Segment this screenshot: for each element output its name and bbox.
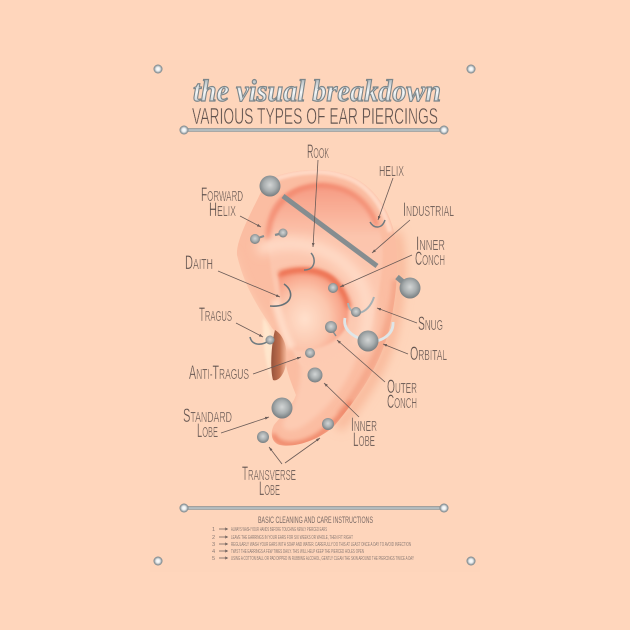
helix ring <box>370 220 385 227</box>
label: standard lobe: LOBE <box>197 421 218 442</box>
helix rim highlight <box>272 172 390 232</box>
panel <box>150 60 480 572</box>
inner fold <box>267 184 383 374</box>
label: anti-tragus: ANTI-TRAGUS <box>189 363 249 384</box>
concha bowl <box>278 268 348 350</box>
orbital ring <box>345 318 393 352</box>
step 4: TWIST THE EARRINGS A FEW TIMES DAILY. THIS WILL HELP KEEP THE PIERCED HOLES OPEN <box>231 549 364 555</box>
industrial barbell <box>260 176 420 298</box>
step 2: 2 <box>212 535 215 541</box>
ear soft shadow <box>338 232 400 428</box>
step 2 <box>212 535 353 541</box>
step 5: 5 <box>212 556 215 562</box>
ear base <box>237 170 396 446</box>
concha left fade <box>275 300 292 348</box>
label: standard lobe: STANDARD <box>183 406 232 427</box>
title divider bar <box>180 126 448 134</box>
step 4: 4 <box>212 549 215 555</box>
label: outer conch: OUTER <box>387 377 417 398</box>
standard lobe stud <box>272 398 292 418</box>
ear left fade <box>257 304 270 324</box>
step 4 <box>212 549 364 555</box>
step 2: LEAVE THE EARRINGS IN YOUR EARS FOR SIX WEEKS OR WHOLE, THEN FIT RIGHT <box>231 535 353 541</box>
outer conch stud <box>325 321 337 336</box>
lobe body <box>284 346 358 430</box>
snug ring <box>348 297 374 317</box>
title: the visual breakdown <box>193 73 441 108</box>
transverse lobe stud <box>257 431 269 443</box>
label: inner lobe: INNER <box>351 415 377 436</box>
lower divider bar <box>180 504 448 512</box>
label: snug: SNUG <box>418 314 443 335</box>
daith ring <box>270 284 291 306</box>
label: outer conch: CONCH <box>387 392 417 413</box>
label: forward helix: HELIX <box>209 200 236 221</box>
label: transverse lobe: TRANSVERSE <box>242 464 296 485</box>
tragus light strip <box>263 318 272 380</box>
label: standard lobe <box>183 406 232 442</box>
label: helix: HELIX <box>379 163 404 180</box>
label: transverse lobe <box>242 464 296 500</box>
rook ring <box>304 253 314 270</box>
label: inner conch: CONCH <box>415 249 445 270</box>
anti-tragus stud <box>305 348 315 358</box>
step 3: REGULARLY WASH YOUR EARS WITH SOAP AND WATER. CAREFULLY DO THIS AT LEAST ONCE A DAY TO AVOID INFECTION <box>231 542 411 548</box>
label: transverse lobe: LOBE <box>259 479 280 500</box>
subtitle: VARIOUS TYPES OF EAR PIERCINGS <box>192 103 438 129</box>
forward helix studs <box>250 228 288 244</box>
step 3 <box>212 542 411 548</box>
inner fold red edge <box>268 185 377 240</box>
right edge shading <box>340 280 396 415</box>
label: rook: ROOK <box>307 142 329 163</box>
concha red edge <box>279 270 349 308</box>
inner conch stud <box>328 283 338 293</box>
label: inner conch <box>415 234 445 270</box>
ear illustration <box>237 170 408 446</box>
step 5: USING A COTTON BALL OR PAD DIPPED IN RUBBING ALCOHOL, GENTLY CLEAN THE SKIN AROUND THE PIERCINGS TWICE A DAY <box>231 556 414 562</box>
antihelix light <box>258 244 368 350</box>
inner lobe studs <box>308 368 334 430</box>
lobe lower edge <box>273 402 352 445</box>
label: forward helix: FORWARD <box>201 185 243 206</box>
care instructions list <box>212 527 414 562</box>
label: inner lobe: LOBE <box>353 430 375 451</box>
step 1: 1 <box>212 527 215 533</box>
label: daith: DAITH <box>185 253 213 274</box>
label: industrial: INDUSTRIAL <box>403 200 454 221</box>
label: forward helix <box>201 185 243 221</box>
ear canal notch <box>271 330 287 380</box>
label: inner conch: INNER <box>416 234 445 255</box>
care instructions list: ALWAYS WASH YOUR HANDS BEFORE TOUCHING NEWLY PIERCED EARS <box>231 527 327 533</box>
step 3: 3 <box>212 542 215 548</box>
tragus ring <box>250 336 274 344</box>
leader lines <box>218 160 417 464</box>
label: inner lobe <box>351 415 377 451</box>
care instructions heading: BASIC CLEANING AND CARE INSTRUCTIONS <box>258 515 373 526</box>
label: orbital: ORBITAL <box>410 344 447 365</box>
label: tragus: TRAGUS <box>199 305 232 326</box>
step 5 <box>212 556 414 562</box>
corner pins <box>154 64 476 566</box>
step 1 <box>212 527 327 533</box>
label: outer conch <box>387 377 417 413</box>
